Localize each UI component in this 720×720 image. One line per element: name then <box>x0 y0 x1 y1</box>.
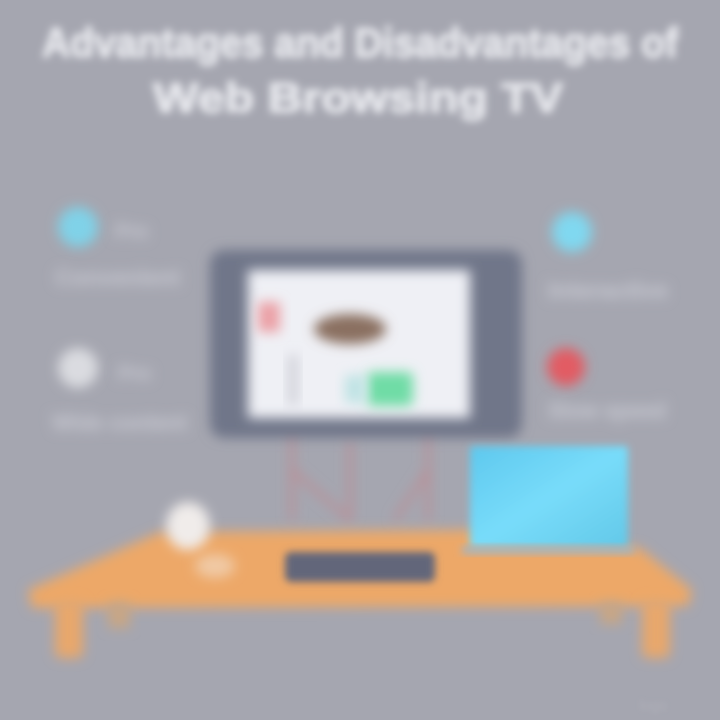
monitor screen <box>248 270 470 418</box>
screen grey column <box>288 355 298 405</box>
top right icon: blue circle <box>552 212 592 252</box>
middle right icon: red circle <box>547 348 585 386</box>
screen green button <box>367 372 413 406</box>
desk inner left leg <box>108 602 130 628</box>
top left text block <box>55 221 181 290</box>
desk left leg <box>55 600 83 658</box>
middle left text block: Pro <box>118 363 151 385</box>
desk right leg <box>642 600 670 658</box>
monitor stand lines <box>292 425 428 520</box>
monitor frame <box>210 250 522 438</box>
screen red marker <box>258 302 280 332</box>
title: Web Browsing TV <box>153 74 563 121</box>
laptop base shadow <box>462 546 634 554</box>
middle right text block: Slow speed <box>548 398 666 423</box>
top left icon: blue circle <box>58 207 98 247</box>
desk inner right leg <box>600 602 622 624</box>
screen light blue block <box>345 375 365 403</box>
screen image <box>314 314 386 344</box>
title: Advantages and Disadvantages of <box>42 19 679 66</box>
middle left icon: white circle <box>58 348 98 388</box>
laptop screen <box>470 446 628 548</box>
monitor <box>210 250 522 438</box>
desk <box>28 530 692 658</box>
keyboard <box>285 552 435 582</box>
laptop <box>462 446 634 554</box>
top right text block: Interactive <box>548 278 668 303</box>
mouse / cup <box>166 502 235 578</box>
middle left text block: Wide content <box>52 410 188 435</box>
middle left text block <box>52 363 188 435</box>
top left text block: Convenient <box>55 265 181 290</box>
watermark: logo <box>640 697 667 713</box>
desk top <box>28 530 692 608</box>
top left text block: Pro <box>115 221 148 243</box>
title <box>42 19 679 121</box>
